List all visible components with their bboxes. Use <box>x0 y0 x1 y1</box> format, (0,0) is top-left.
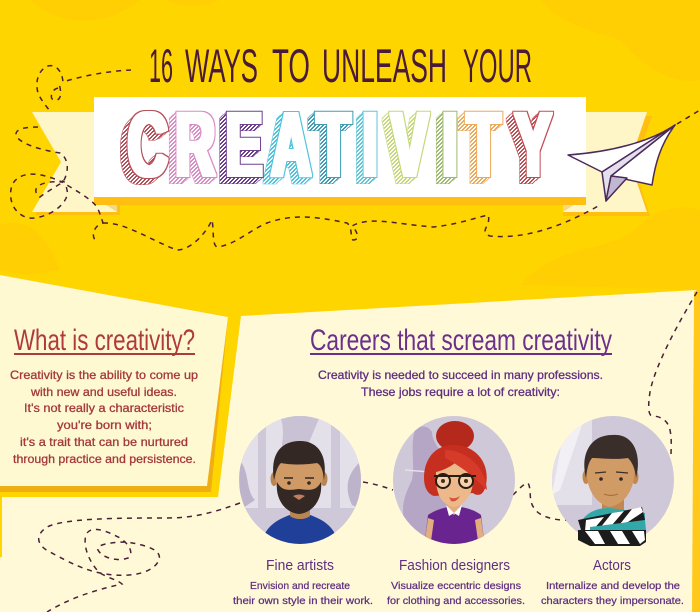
banner <box>94 97 586 197</box>
text block: actors <box>541 558 684 607</box>
icon: actor <box>552 416 674 546</box>
text block: fashion designers: Fashion designers <box>399 558 510 574</box>
text block: careers intro: Creativity is needed to succeed in many professions. <box>318 368 603 382</box>
text block: definition: it's a trait that can be nurtured <box>20 435 188 449</box>
icon: fashion designer <box>393 416 515 548</box>
text block: definition: Creativity is the ability to come up <box>10 368 198 382</box>
heading: CREATIVITY: Y <box>515 94 552 197</box>
text block: definition: you're born with; <box>57 418 152 432</box>
text block: fine artists: Envision and recreate <box>250 580 350 592</box>
panel edge: right <box>692 288 700 612</box>
dashed flight path <box>11 66 700 250</box>
title: 16 <box>149 39 173 92</box>
title <box>149 39 532 92</box>
heading: CREATIVITY <box>128 94 552 197</box>
text block: fashion designers <box>387 558 525 607</box>
heading: CREATIVITY: E <box>226 94 262 197</box>
icon: fine artist <box>239 416 365 550</box>
text block: actors: Actors <box>593 558 631 574</box>
text block: actors: characters they impersonate. <box>541 595 684 607</box>
heading: CREATIVITY: I <box>362 94 378 197</box>
heading: CREATIVITY: T <box>317 94 351 197</box>
heading: CREATIVITY: T <box>467 94 501 197</box>
banner shadow <box>94 197 586 205</box>
heading: CREATIVITY: C <box>128 94 168 197</box>
ribbon: left tail <box>32 112 120 215</box>
heading: CREATIVITY: A <box>271 94 311 197</box>
text block: definition <box>10 368 198 466</box>
heading: CREATIVITY: V <box>391 94 428 197</box>
ribbon: right tail <box>563 112 652 216</box>
title: YOUR <box>463 39 532 92</box>
title: UNLEASH <box>322 39 447 92</box>
icon: clapperboard <box>578 507 646 546</box>
paper plane <box>568 125 675 201</box>
title: TO <box>272 39 310 92</box>
heading: CREATIVITY: I <box>442 94 458 197</box>
text block: definition: It's not really a characteristic <box>24 401 184 415</box>
text block: definition: with new and useful ideas. <box>30 385 177 399</box>
text block: fashion designers: for clothing and accessories. <box>387 595 525 607</box>
text block: definition: through practice and persistence. <box>13 452 196 466</box>
heading: what is creativity: What is creativity? <box>14 324 195 357</box>
text block: fine artists: their own style in their work. <box>233 595 373 607</box>
title: WAYS <box>185 39 258 92</box>
text block: careers intro: These jobs require a lot of creativity: <box>361 385 560 399</box>
panel: lower cream area and careers <box>0 289 700 612</box>
heading: careers: Careers that scream creativity <box>310 324 612 357</box>
text block: fine artists <box>233 558 373 607</box>
text block: actors: Internalize and develop the <box>546 580 680 592</box>
panel edge: left <box>0 497 2 557</box>
text block: fine artists: Fine artists <box>266 558 334 574</box>
heading: CREATIVITY: R <box>175 94 215 197</box>
panel: what is creativity <box>0 270 238 497</box>
text block: careers intro <box>318 368 603 399</box>
text block: fashion designers: Visualize eccentric designs <box>391 580 521 592</box>
dashed connectors <box>39 292 697 612</box>
